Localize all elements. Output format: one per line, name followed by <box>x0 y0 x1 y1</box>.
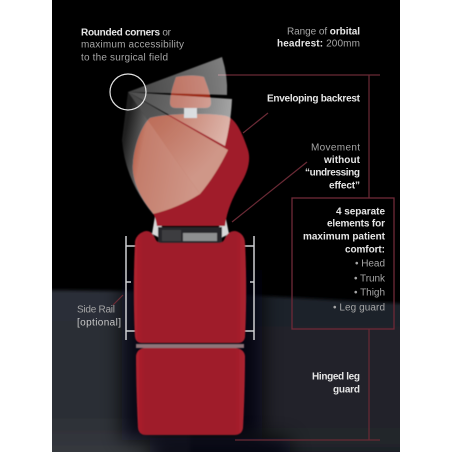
text: movement <box>305 142 361 192</box>
text: enveloping backrest: Enveloping backrest <box>267 94 361 104</box>
text: 4 separate elements: • Leg guard <box>333 302 385 314</box>
trunk cushion <box>134 231 246 343</box>
text: 4 separate elements: • Trunk <box>354 274 386 284</box>
text: rounded corners: to the surgical field <box>81 52 168 64</box>
text: 4 separate elements: • Thigh <box>354 288 385 298</box>
headrest <box>170 76 211 108</box>
side rail: left <box>126 236 137 340</box>
text: rounded corners <box>81 28 184 64</box>
fan sector 2 <box>128 92 232 146</box>
text: 4 separate elements: • Head <box>355 258 385 270</box>
text: movement: effect” <box>329 180 360 192</box>
text: 4 separate elements: comfort: <box>345 244 385 256</box>
chair <box>122 57 249 435</box>
text: rounded corners: Rounded corners or <box>81 28 172 38</box>
text: movement: without <box>323 155 361 166</box>
leader lines <box>113 75 380 440</box>
box: 4 separate elements <box>292 198 394 329</box>
text: side rail: [optional] <box>77 318 121 328</box>
backrest <box>133 114 249 226</box>
infographic <box>52 0 400 452</box>
text: hinged leg guard: Hinged leg <box>312 372 360 382</box>
text: movement: “undressing <box>305 168 360 178</box>
chrome hinge strip <box>136 344 244 348</box>
mechanism <box>158 227 222 244</box>
text: side rail: Side Rail <box>77 304 115 316</box>
fan sector 3 <box>128 92 228 194</box>
text: orbital headrest <box>277 26 360 50</box>
text: orbital headrest: headrest: 200mm <box>277 38 360 50</box>
text: orbital headrest: Range of orbital <box>287 26 360 38</box>
text: 4 separate elements <box>303 206 386 314</box>
text: 4 separate elements: maximum patient <box>303 232 386 242</box>
text: hinged leg guard <box>312 372 360 396</box>
headrest post <box>184 108 197 118</box>
text: 4 separate elements: 4 separate <box>336 206 385 218</box>
text: 4 separate elements: elements for <box>327 218 385 230</box>
leg guard cushion <box>136 348 245 435</box>
text: movement: Movement <box>311 142 360 154</box>
text: side rail <box>77 304 121 328</box>
chrome hinge brackets <box>152 214 229 240</box>
side rail: right <box>244 236 254 340</box>
fan sector 1 <box>128 57 227 95</box>
text: rounded corners: maximum accessibility <box>81 40 184 50</box>
text: hinged leg guard: guard <box>333 384 360 396</box>
backrest tint under fan <box>133 114 230 214</box>
fan sector 4 <box>122 92 200 214</box>
circle: rounded corners <box>110 74 146 110</box>
